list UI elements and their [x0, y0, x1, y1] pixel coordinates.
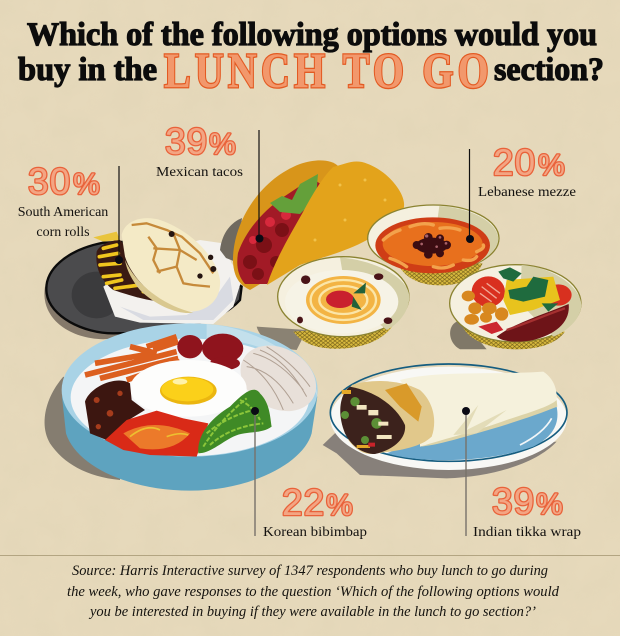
illustration: tikka wrap on plate — [323, 364, 567, 478]
percentage: Korean bibimbap 22%: 22% — [282, 482, 354, 523]
illustration: red soup bowl — [368, 205, 499, 285]
source note — [67, 563, 560, 620]
pointer: tacos — [256, 130, 264, 242]
source note: Source: Harris Interactive survey of 1347 respondents who buy lunch to go during — [72, 563, 548, 579]
label: Indian tikka wrap: Indian tikka wrap — [473, 525, 581, 540]
illustration: bibimbap bowl — [45, 323, 328, 491]
illustration: hummus bowl — [257, 257, 409, 350]
illustration: taco — [220, 160, 404, 290]
percentage: Lebanese mezze 20%: 20% — [493, 142, 566, 183]
pointer: mezze — [466, 149, 474, 243]
percentage: Mexican tacos 39%: 39% — [165, 121, 237, 162]
title: buy in the — [18, 52, 157, 88]
title: Which of the following options would you — [27, 17, 597, 53]
label: Mexican tacos: Mexican tacos — [156, 165, 243, 180]
title: section? — [494, 52, 604, 88]
illustration: salad bowl — [450, 265, 581, 349]
label: South American corn rolls: South American — [18, 205, 108, 220]
illustration: corn roll on dark plate — [44, 218, 243, 339]
source note: you be interested in buying if they were available in the lunch to go section?’ — [88, 604, 536, 620]
percentage: South American corn rolls 30%: 30% — [28, 161, 101, 202]
label: Korean bibimbap: Korean bibimbap — [263, 525, 367, 540]
label: Lebanese mezze: Lebanese mezze — [478, 185, 576, 200]
percentage: Indian tikka wrap 39%: 39% — [492, 481, 564, 522]
pointer: bibimbap — [251, 407, 259, 536]
pointer: wrap — [462, 407, 470, 536]
pointer: corn rolls — [115, 166, 123, 264]
title — [18, 17, 604, 98]
source note: the week, who gave responses to the question ‘Which of the following options would — [67, 584, 560, 600]
label: South American corn rolls: corn rolls — [36, 225, 90, 240]
title: LUNCH TO GO — [164, 43, 489, 98]
